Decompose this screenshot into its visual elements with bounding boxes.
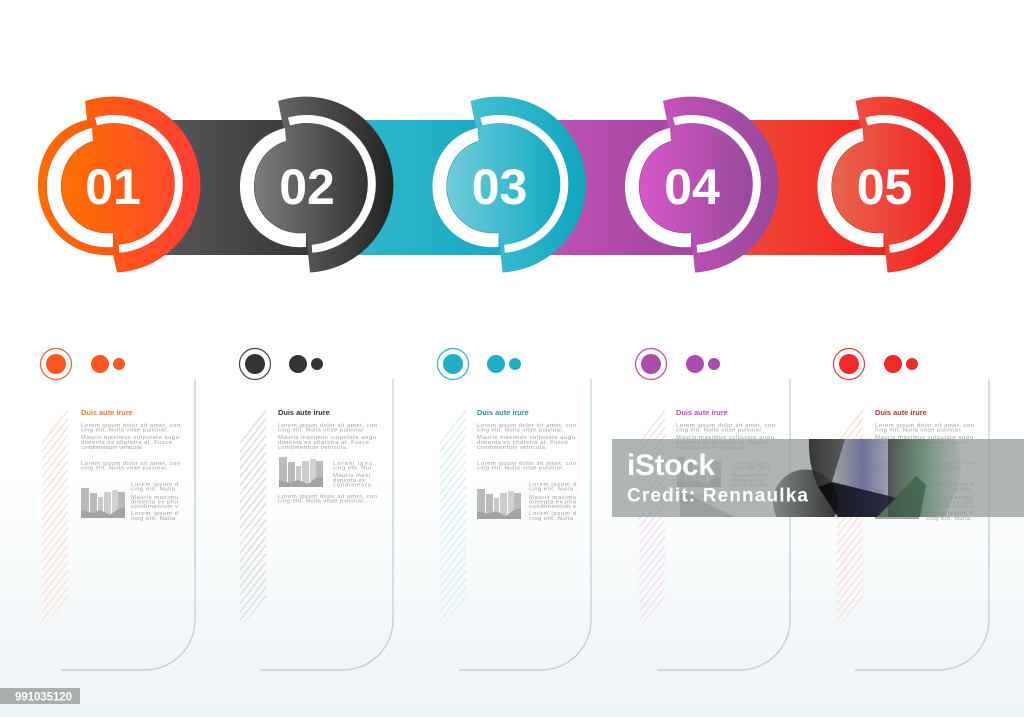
panel: column 2: cing elit. Nulla vitae pulvinar. xyxy=(278,428,365,434)
panel: column 5: Lorem ipsum dolor sit amet, con xyxy=(875,461,974,467)
panel: column 3: cing elit. Nulla vitae pulvinar. xyxy=(477,466,564,472)
panel: column 3 xyxy=(436,348,592,671)
step 04 badge: 04 xyxy=(664,159,720,215)
step 01 badge: 01 xyxy=(85,159,141,215)
panel: column 5: cing elit. Nulla vitae pulvinar. xyxy=(875,428,962,434)
panel: column 1: Duis aute irure xyxy=(81,408,133,417)
panel: column 1: dimenta ex pha xyxy=(131,500,179,506)
panel: column 5: dimenta ex pha xyxy=(926,500,974,506)
panel: column 5: Lorem ipsum dolor sit amet, con xyxy=(875,423,974,429)
panel: column 1: condimentum vehicula. xyxy=(81,445,143,451)
panel: column 5: cing elit. Nulla vitae pulvinar. xyxy=(875,466,962,472)
image id tag xyxy=(0,688,80,704)
panel: column 5: Mauris maximu xyxy=(926,495,973,501)
panel: column 5: condimentum vehicula. xyxy=(875,445,945,451)
panel: column 3: Lorem ipsum d xyxy=(529,482,576,488)
panel: column 1: Mauris maximu xyxy=(131,495,178,501)
panel: column 3: cing elit. Nulla vitae pulvinar. xyxy=(477,428,564,434)
panel: column 4: Lorem ipsu xyxy=(731,461,770,467)
panel: column 3: Mauris maximus vulputate augu xyxy=(477,435,575,441)
panel: column 5: Lorem ipsum d xyxy=(926,511,973,517)
step 02 badge xyxy=(240,97,393,272)
panel: column 2: Lorem ipsum dolor sit amet, con xyxy=(278,423,377,429)
panel: column 3: Mauris maximu xyxy=(529,495,576,501)
panel: column 3: cing elit. Nulla xyxy=(529,486,574,492)
panel: column 3: Lorem ipsum dolor sit amet, con xyxy=(477,461,576,467)
panel: column 3: Lorem ipsum dolor sit amet, con xyxy=(477,423,576,429)
panel: column 5: Mauris maximus vulputate augu xyxy=(875,435,973,441)
panel: column 1: dimenta ex pharetra at. Fusce xyxy=(81,440,173,446)
panel: column 4: Mauris maxi xyxy=(731,473,768,479)
panel: column 3: condimentum v xyxy=(529,504,576,510)
panel: column 5: condimentum v xyxy=(926,504,973,510)
panel: column 2: Mauris maximus vulputate augu xyxy=(278,435,376,441)
panel: column 2: condimentu xyxy=(333,482,371,488)
panel: column 4: dimenta ex xyxy=(731,478,763,484)
panel: column 1: cing elit. Nulla xyxy=(131,486,176,492)
watermark banner xyxy=(612,439,1024,517)
panel: column 1 xyxy=(40,348,196,671)
panel: column 1: Lorem ipsum dolor sit amet, con xyxy=(81,423,180,429)
panel: column 4: Lorem ipsum dolor sit amet, con xyxy=(676,423,775,429)
step 01 badge xyxy=(38,97,200,272)
step 02 badge: 02 xyxy=(279,159,335,215)
panel: column 3: condimentum vehicula. xyxy=(477,445,547,451)
panel: column 5: cing elit. Nulla xyxy=(926,486,971,492)
connecting bands xyxy=(150,120,890,255)
panel: column 2: dimenta ex pharetra at. Fusce xyxy=(278,440,370,446)
panel: column 1: cing elit. Nulla xyxy=(131,516,176,522)
panel: column 1: cing elit. Nulla vitae pulvinar. xyxy=(81,428,168,434)
panel: column 4: condimentum vehicula. xyxy=(676,445,746,451)
panel: column 4: condimentu xyxy=(731,482,769,488)
panel: column 5: Duis aute irure xyxy=(875,408,927,417)
panel: column 2 xyxy=(238,348,394,671)
step 03 badge xyxy=(432,97,586,272)
panel: column 2: Mauris maxi xyxy=(333,473,370,479)
panel: column 4: Duis aute irure xyxy=(676,408,728,417)
step 05 badge xyxy=(818,97,971,272)
panel: column 5: Lorem ipsum d xyxy=(926,482,973,488)
panel: column 4: Mauris maximus vulputate augu xyxy=(676,435,774,441)
watermark banner: Credit: Rennaulka xyxy=(627,486,808,506)
panel: column 1: Mauris maximus vulputate augu xyxy=(81,435,179,441)
panel: column 1: Lorem ipsum d xyxy=(131,511,178,517)
watermark banner: iStock xyxy=(627,449,715,482)
image id tag: 991035120 xyxy=(15,692,72,704)
step 05 badge: 05 xyxy=(857,159,912,215)
panel: column 4: cing elit. Nulla vitae pulvinar. xyxy=(676,498,763,504)
panel: column 1: cing elit. Nulla vitae pulvinar. xyxy=(81,466,168,472)
panel: column 3: dimenta ex pharetra at. Fusce xyxy=(477,440,569,446)
panel: column 2: Lorem ipsu xyxy=(333,461,372,467)
panel: column 2: Duis aute irure xyxy=(278,408,330,417)
panel: column 3: cing elit. Nulla xyxy=(529,516,574,522)
panel: column 5: dimenta ex pharetra at. Fusce xyxy=(875,440,967,446)
step 03 badge: 03 xyxy=(472,159,527,215)
panel: column 2: dimenta ex xyxy=(333,478,365,484)
panel: column 5 xyxy=(832,348,990,671)
panel: column 1: Lorem ipsum dolor sit amet, con xyxy=(81,461,180,467)
step 04 badge xyxy=(625,97,778,272)
panel: column 3: dimenta ex pha xyxy=(529,500,577,506)
panel: column 4: dimenta ex pharetra at. Fusce xyxy=(676,440,768,446)
panel: column 2: cing elit. Nulla vitae pulvinar. xyxy=(278,498,365,504)
panel: column 1: condimentum v xyxy=(131,504,178,510)
panel: column 4: cing elit. Nul xyxy=(731,466,769,472)
panel: column 2: condimentum vehicula. xyxy=(278,445,348,451)
panel: column 4: cing elit. Nulla vitae pulvinar. xyxy=(676,428,763,434)
panel: column 4: Lorem ipsum dolor sit amet, con xyxy=(676,494,775,500)
panel: column 2: cing elit. Nul xyxy=(333,466,371,472)
panel: column 2: Lorem ipsum dolor sit amet, con xyxy=(278,494,377,500)
panel: column 5: cing elit. Nulla xyxy=(926,516,971,522)
panel: column 1: Lorem ipsum d xyxy=(131,482,178,488)
panel: column 3: Lorem ipsum d xyxy=(529,511,576,517)
panel: column 4 xyxy=(634,348,791,671)
panel: column 3: Duis aute irure xyxy=(477,408,529,417)
